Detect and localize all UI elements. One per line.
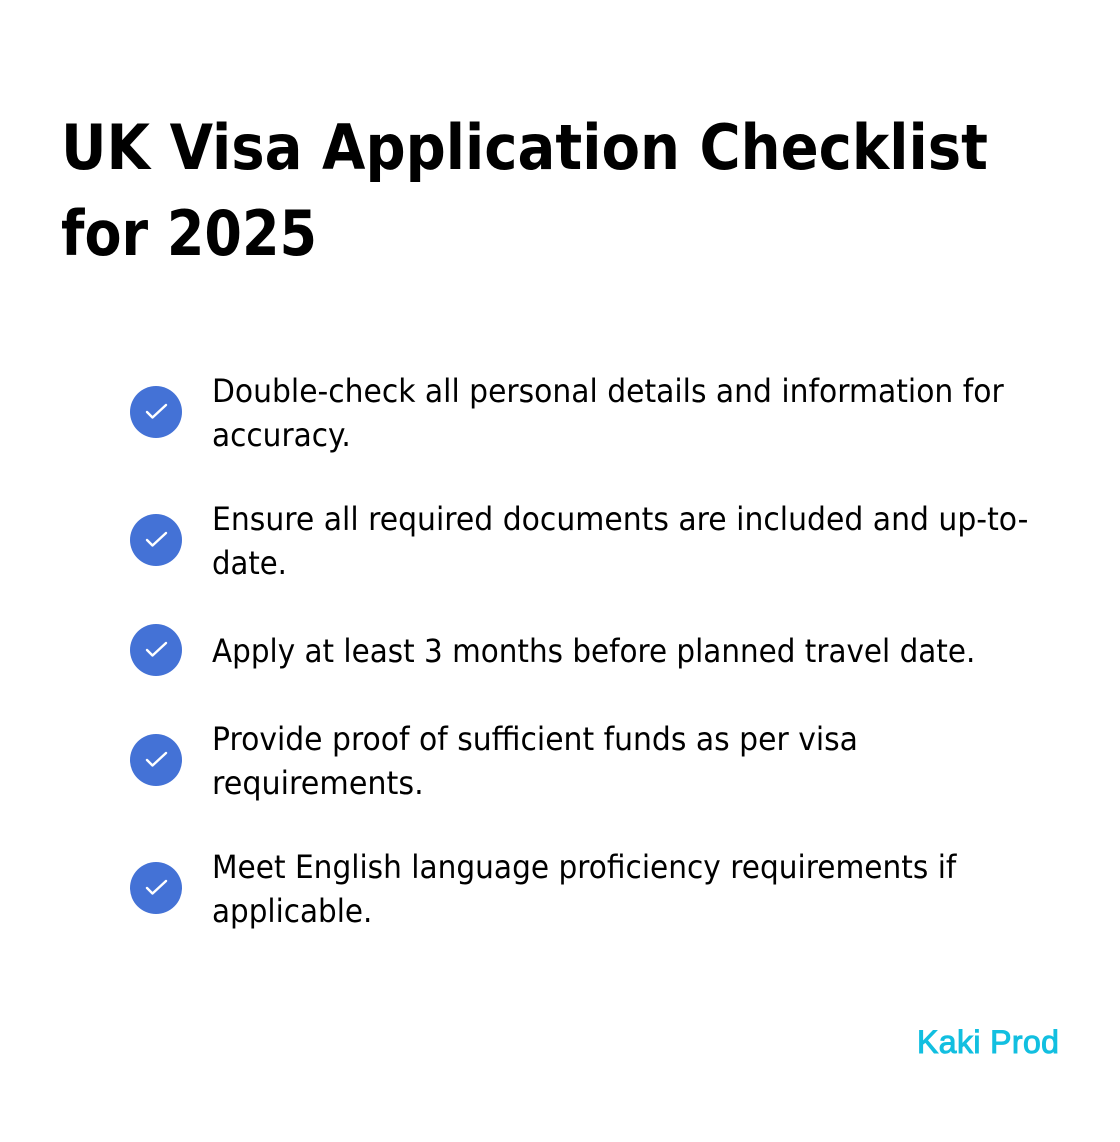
item text: Ensure all required documents are included and up-to- bbox=[212, 500, 1028, 538]
icon: check circle bbox=[130, 734, 182, 786]
icon: check circle bbox=[130, 624, 182, 676]
checklist item 4 bbox=[130, 720, 858, 802]
item text bbox=[212, 848, 957, 930]
item text: Provide proof of sufficient funds as per visa bbox=[212, 720, 858, 758]
title bbox=[61, 111, 988, 270]
logo: Kaki Prod: Kaki Prod bbox=[917, 1024, 1059, 1060]
title: UK Visa Application Checklist bbox=[61, 111, 988, 184]
checklist item 1 bbox=[130, 372, 1004, 454]
checklist item 2 bbox=[130, 500, 1028, 582]
item text bbox=[212, 720, 858, 802]
item text: applicable. bbox=[212, 892, 372, 930]
checklist item 5 bbox=[130, 848, 957, 930]
title: for 2025 bbox=[61, 197, 317, 270]
icon: check circle bbox=[130, 514, 182, 566]
item text: Double-check all personal details and information for bbox=[212, 372, 1004, 410]
checklist item 3 bbox=[130, 624, 975, 676]
item text bbox=[212, 500, 1028, 582]
item text: date. bbox=[212, 544, 287, 582]
item text: requirements. bbox=[212, 764, 424, 802]
item text: Meet English language proficiency requirements if bbox=[212, 848, 956, 886]
item text: Apply at least 3 months before planned travel date. bbox=[212, 632, 975, 670]
item text bbox=[212, 372, 1004, 454]
icon: check circle bbox=[130, 862, 182, 914]
item text: accuracy. bbox=[212, 416, 351, 454]
icon: check circle bbox=[130, 386, 182, 438]
